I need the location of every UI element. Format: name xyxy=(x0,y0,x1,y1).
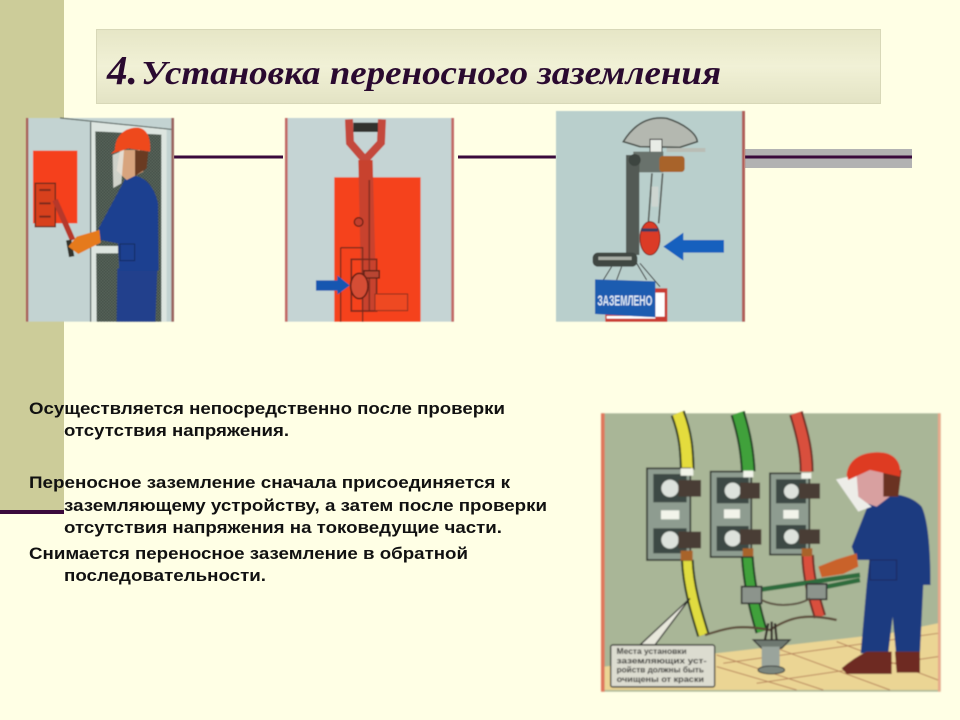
crank xyxy=(626,155,639,255)
ground clamps and rod xyxy=(747,575,860,592)
floor xyxy=(605,623,938,690)
disconnector 1 xyxy=(647,468,701,561)
green bus xyxy=(738,413,748,472)
paragraph 3 xyxy=(29,544,468,585)
paragraph 1: отсутствия напряжения. xyxy=(64,421,289,440)
paragraph 3: Снимается переносное заземление в обратной xyxy=(29,544,468,563)
paragraph 1: Осуществляется непосредственно после проверки xyxy=(29,399,505,418)
callout: Места установки xyxy=(617,647,687,656)
cylinder xyxy=(633,152,663,172)
shelf handle xyxy=(95,246,118,253)
body text xyxy=(29,399,547,585)
paragraph 2: Переносное заземление сначала присоединяется к xyxy=(29,473,511,492)
mechanism xyxy=(354,218,363,226)
lever xyxy=(55,200,73,240)
callout: очищены от краски xyxy=(617,675,704,684)
red plate xyxy=(33,151,77,223)
paragraph 2 xyxy=(29,473,547,537)
disconnector 3 xyxy=(770,473,820,556)
illustration: padlocked drive handle xyxy=(285,118,454,322)
illustration: grounded lever with sign: ЗАЗЕМЛЕНО xyxy=(597,293,652,309)
ground cables xyxy=(705,617,837,635)
padlock xyxy=(640,222,660,255)
clamp xyxy=(623,118,697,147)
red bus xyxy=(796,413,807,472)
red sign behind xyxy=(605,288,667,322)
callout: заземляющих уст- xyxy=(617,656,707,665)
paragraph 3: последовательности. xyxy=(64,566,266,585)
visor xyxy=(113,150,124,188)
connector line with grey band xyxy=(174,149,912,168)
callout: ройств должны быть xyxy=(617,666,704,675)
switch box xyxy=(35,183,55,227)
worker xyxy=(818,452,931,674)
blue sign xyxy=(595,279,655,317)
door opening xyxy=(91,122,167,322)
shackle links xyxy=(648,173,663,223)
handle xyxy=(349,119,382,160)
padlock xyxy=(364,271,379,278)
sidebar accent line xyxy=(0,510,64,514)
illustration: grounded lever with sign xyxy=(556,111,745,322)
sign chains xyxy=(603,263,660,287)
paragraph 2: заземляющему устройству, а затем после проверки xyxy=(64,496,547,515)
paragraph 2: отсутствия напряжения на токоведущие части. xyxy=(64,518,502,537)
title number: 4. xyxy=(106,47,138,93)
title panel xyxy=(96,30,880,104)
jacket xyxy=(99,176,159,271)
paragraph 1 xyxy=(29,399,505,440)
arrow: points to padlock xyxy=(316,275,350,295)
callout xyxy=(611,645,715,687)
illustration: worker operating switch xyxy=(26,118,174,322)
red plate xyxy=(334,177,421,322)
trousers xyxy=(117,268,157,322)
title: Установка переносного заземления xyxy=(141,55,721,92)
callout pointer xyxy=(640,598,690,645)
helmet xyxy=(111,128,150,154)
hand xyxy=(68,230,101,254)
yellow bus xyxy=(678,413,687,470)
ground terminal xyxy=(753,622,790,674)
disconnector 2 xyxy=(711,471,761,557)
illustration: worker applying portable grounding xyxy=(601,413,941,692)
neck/face xyxy=(117,150,143,180)
arrow: points to padlock xyxy=(663,233,724,261)
left sidebar band xyxy=(0,0,64,510)
